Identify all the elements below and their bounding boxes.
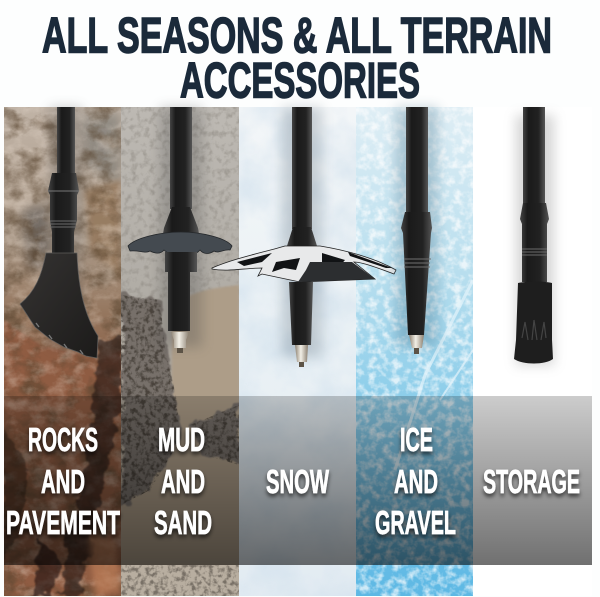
pole: snow basket — [212, 107, 396, 367]
pole: storage rubber cap — [514, 107, 554, 365]
label: snow: SNOW — [266, 463, 330, 500]
panel: rocks and pavement — [4, 107, 121, 596]
title — [42, 8, 552, 108]
label: ice and gravel: GRAVEL — [375, 504, 456, 541]
dark label band — [4, 396, 592, 565]
label: rocks and pavement: ROCKS — [28, 421, 98, 458]
label: mud and sand — [154, 421, 212, 541]
pole: ice and gravel tip — [396, 107, 438, 354]
pole: rocks and pavement shovel tip — [20, 107, 98, 358]
label: rocks and pavement — [6, 421, 120, 541]
panel: mud and sand — [121, 107, 239, 596]
label: rocks and pavement: PAVEMENT — [6, 504, 120, 541]
label: ice and gravel: ICE — [400, 421, 433, 458]
pole: mud and sand basket — [128, 107, 232, 353]
label: mud and sand: AND — [161, 463, 205, 500]
icon: mud basket disk — [128, 232, 232, 256]
title: ACCESSORIES — [180, 52, 420, 108]
panel: ice and gravel — [356, 107, 473, 596]
label: ice and gravel — [375, 421, 456, 541]
label: mud and sand: MUD — [158, 421, 205, 458]
label: ice and gravel: AND — [394, 463, 438, 500]
icon: snow basket — [212, 246, 396, 282]
label: mud and sand: SAND — [154, 504, 212, 541]
panel: storage — [473, 107, 592, 596]
icon: shovel-shaped rubber tip — [20, 253, 98, 358]
icon: rubber foot cap — [514, 282, 553, 364]
panel: snow — [239, 107, 356, 596]
label: rocks and pavement: AND — [41, 463, 85, 500]
